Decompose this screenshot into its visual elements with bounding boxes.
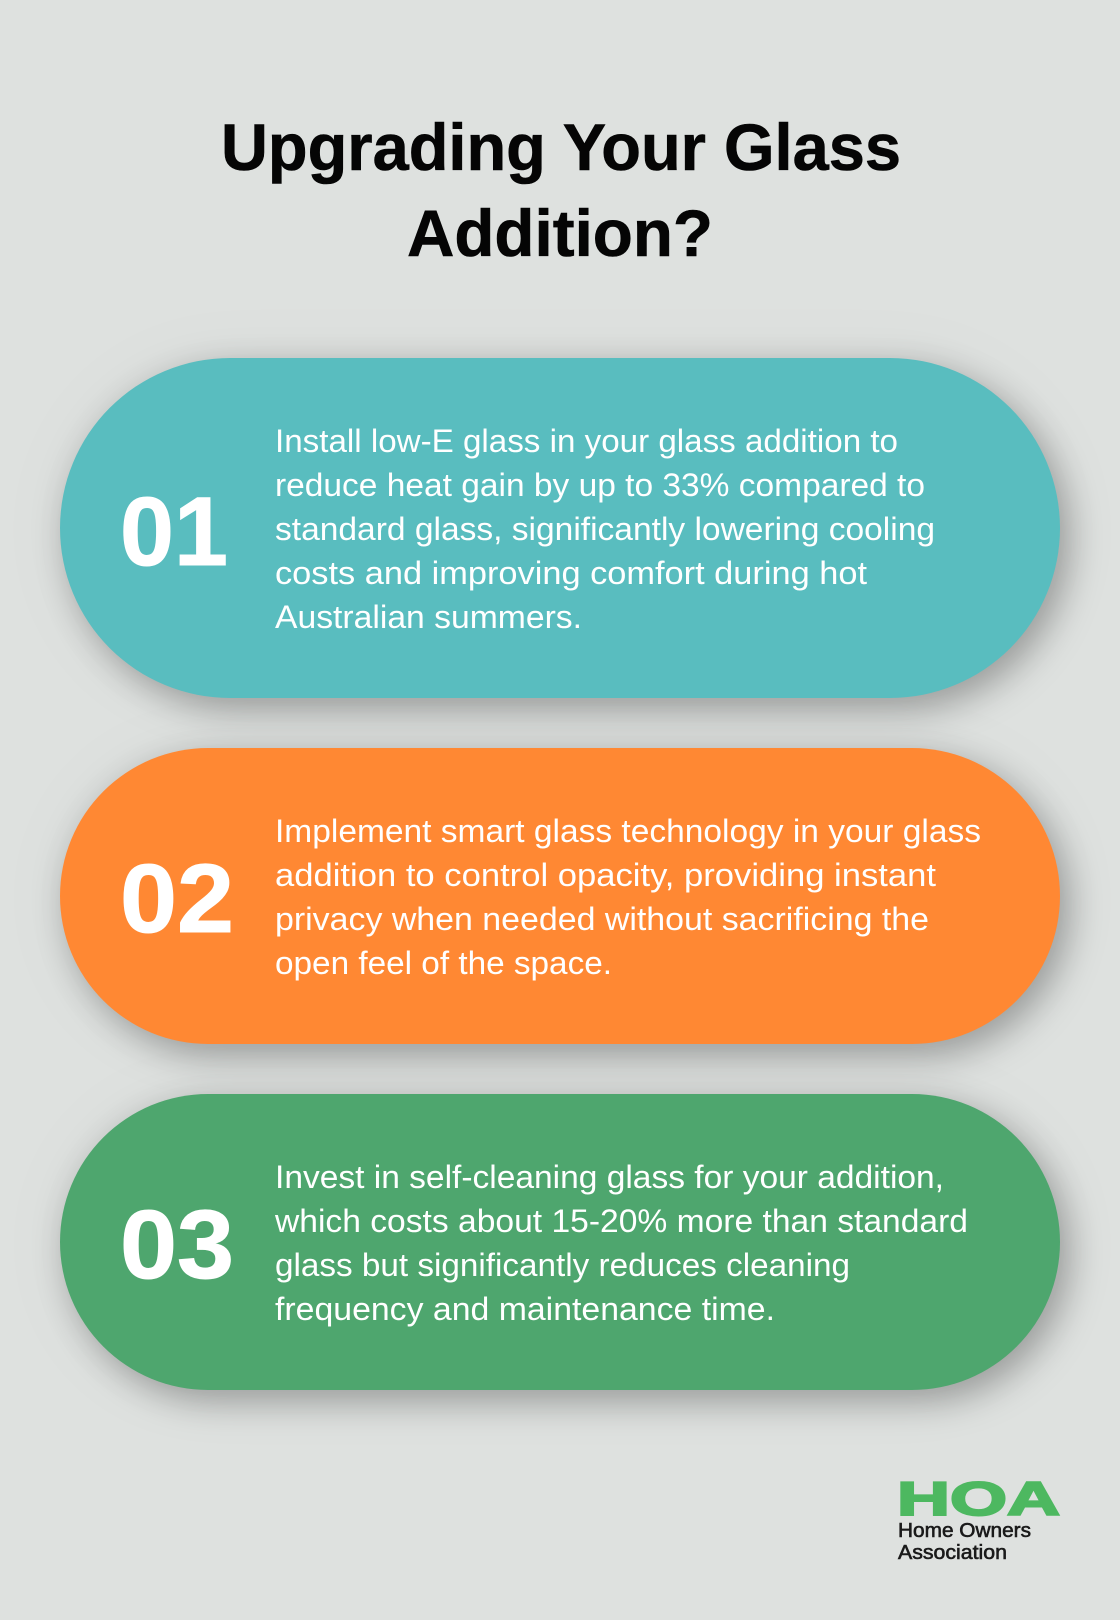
body text: smart glass xyxy=(275,813,981,981)
logo: HOA Home Owners Association: HOA xyxy=(897,1472,1060,1525)
panel: step 01 xyxy=(60,358,1060,698)
step number 02: 02 xyxy=(120,844,234,953)
panel: step 03 xyxy=(60,1094,1060,1390)
body text: low-E glass: reduce heat gain by up to 33% compared to xyxy=(275,467,925,503)
panel background: green pill xyxy=(60,1094,1060,1390)
panel background: orange pill xyxy=(60,748,1060,1044)
logo: HOA Home Owners Association: Home Owners xyxy=(898,1520,1031,1542)
body text: low-E glass: Install low-E glass in your glass addition to xyxy=(275,423,898,459)
body text: low-E glass xyxy=(275,423,935,635)
title: Addition? xyxy=(407,197,713,270)
panel background: teal pill xyxy=(60,358,1060,698)
body text: self-cleaning glass: which costs about 15-20% more than standard xyxy=(274,1203,968,1239)
body text: self-cleaning glass: Invest in self-cleaning glass for your addition, xyxy=(275,1159,944,1195)
logo: HOA Home Owners Association: Association xyxy=(898,1542,1007,1564)
logo: HOA Home Owners Association xyxy=(897,1472,1060,1564)
title: Upgrading Your Glass xyxy=(221,111,901,184)
panel: step 02 xyxy=(60,748,1060,1044)
body text: self-cleaning glass: glass but significantly reduces cleaning xyxy=(275,1247,850,1283)
step number 03: 03 xyxy=(120,1190,234,1299)
title xyxy=(221,111,901,270)
body text: self-cleaning glass xyxy=(274,1159,968,1327)
body text: smart glass: addition to control opacity, providing instant xyxy=(275,857,936,893)
body text: self-cleaning glass: frequency and maintenance time. xyxy=(275,1291,775,1327)
body text: low-E glass: costs and improving comfort during hot xyxy=(275,555,867,591)
body text: smart glass: open feel of the space. xyxy=(275,945,612,981)
body text: smart glass: privacy when needed without sacrificing the xyxy=(275,901,929,937)
step number 01: 01 xyxy=(120,477,228,586)
body text: smart glass: Implement smart glass technology in your glass xyxy=(275,813,981,849)
body text: low-E glass: standard glass, significantly lowering cooling xyxy=(275,511,935,547)
body text: low-E glass: Australian summers. xyxy=(275,599,582,635)
